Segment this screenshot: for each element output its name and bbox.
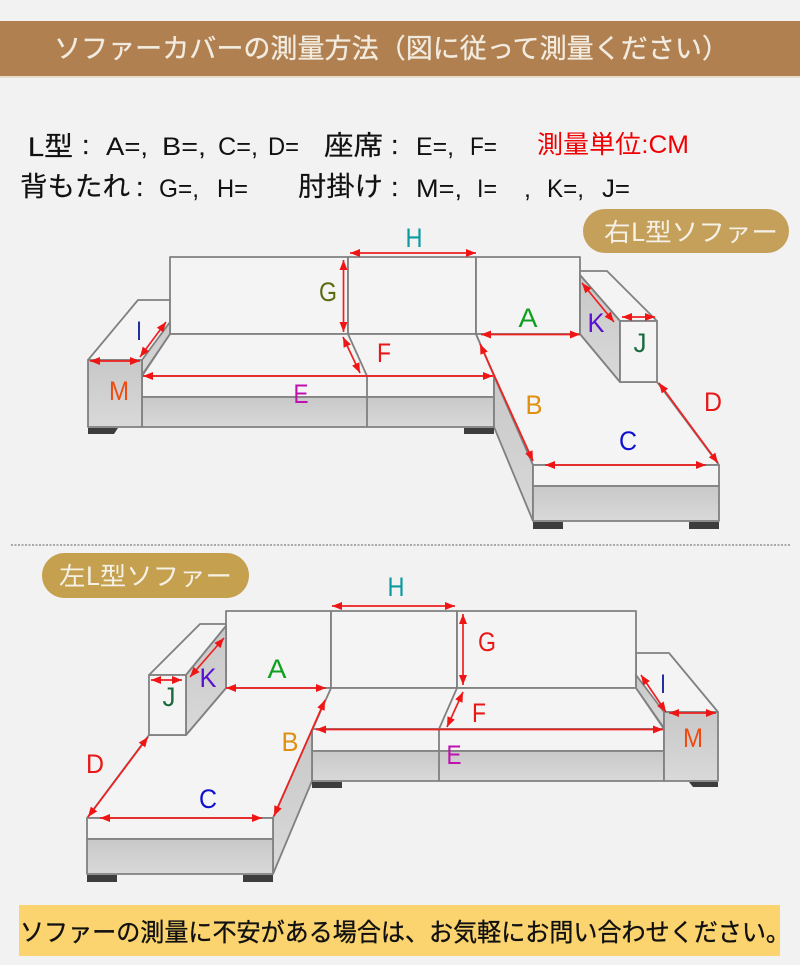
letter labels: left L: C <box>199 784 217 814</box>
letter labels: left L: G <box>478 627 496 657</box>
title banner <box>0 21 800 78</box>
letter labels: left L: F <box>472 698 486 728</box>
letter labels: left L: K <box>200 663 216 693</box>
measurement list: row 2: K=, <box>547 175 584 203</box>
badge: left L sofa: 左L型ソファー <box>59 557 232 593</box>
letter labels: left L: B <box>282 727 298 757</box>
measurement list: row 1: E=, <box>416 133 454 161</box>
measurement unit note: 測量単位:CM <box>537 131 689 159</box>
measurement list: row 1 <box>28 130 497 162</box>
measurement list: row 2: I= <box>477 175 497 203</box>
measurement list: row 1: C=, <box>218 133 258 161</box>
measurement list: row 2 <box>20 172 630 203</box>
letter labels: right L: H <box>406 223 422 253</box>
measurement list: row 2: : <box>136 172 144 202</box>
measurement list: row 1: B=, <box>162 133 206 161</box>
letter labels: left L: J <box>162 682 176 712</box>
letter labels: right L: D <box>704 387 722 417</box>
measurement list: row 2: H= <box>217 175 248 203</box>
badge: right L sofa: 右L型ソファー <box>604 213 778 249</box>
letter labels: right L: E <box>294 379 308 409</box>
letter labels: right L: G <box>319 277 337 307</box>
footer note bar: ソファーの測量に不安がある場合は、お気軽にお問い合わせください。 <box>20 913 790 949</box>
letter labels: right L: M <box>109 376 129 406</box>
letter labels: right L: J <box>634 328 646 358</box>
letter labels: left L: M <box>683 723 703 753</box>
sofa body: right L <box>88 257 719 529</box>
measurement list: row 1: A=, <box>106 133 148 161</box>
letter labels: right L: B <box>526 390 542 420</box>
badge: left L sofa <box>42 553 249 598</box>
letter labels: right L: A <box>518 303 538 333</box>
footer note bar <box>19 905 790 956</box>
dotted divider <box>11 544 790 546</box>
letter labels: right L <box>109 223 722 456</box>
diagram: right L sofa <box>88 223 722 529</box>
letter labels: left L: H <box>388 572 404 602</box>
letter labels: left L: I <box>660 669 666 699</box>
badge: right L sofa <box>583 209 789 253</box>
sofa body: left L <box>87 611 718 882</box>
arrows: right L <box>90 253 718 465</box>
measurement list: row 2: J= <box>602 175 630 203</box>
measurement list: row 2: M=, <box>416 175 462 203</box>
letter labels: right L: F <box>377 338 391 368</box>
title banner: ソファーカバーの測量方法（図に従って測量ください） <box>54 27 729 66</box>
letter labels: left L <box>86 572 703 814</box>
measurement list: row 2: 肘掛け <box>298 172 383 202</box>
measurement list: row 2: G=, <box>159 175 199 203</box>
measurement list: row 2: , <box>524 175 531 203</box>
measurement list: row 1: D= <box>268 133 299 161</box>
measurement list: row 1: 座席 <box>324 131 383 161</box>
measurement list: row 1: L型 <box>28 132 73 162</box>
diagram: left L sofa <box>86 572 718 882</box>
arrows: left L <box>88 606 716 818</box>
letter labels: left L: D <box>86 749 104 779</box>
letter labels: right L: C <box>619 426 637 456</box>
measurement list: row 1: : <box>391 130 399 160</box>
letter labels: right L: K <box>588 308 604 338</box>
measurement list: row 1: F= <box>470 133 497 161</box>
measurement list: row 2: 背もたれ <box>20 172 130 202</box>
letter labels: left L: A <box>268 654 286 684</box>
measurement list: row 2: : <box>391 172 399 202</box>
measurement list: row 1: : <box>82 130 90 160</box>
letter labels: left L: E <box>446 740 462 770</box>
letter labels: right L: I <box>136 316 142 346</box>
